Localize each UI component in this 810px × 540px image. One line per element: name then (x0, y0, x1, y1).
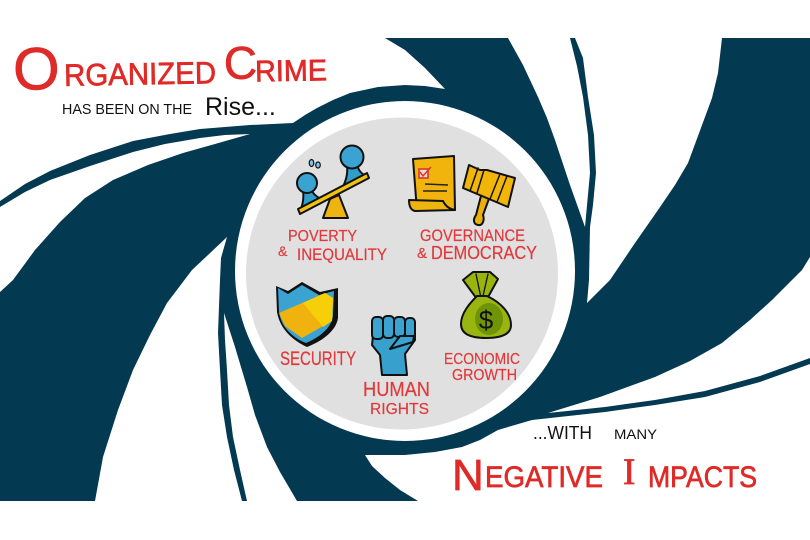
label: Poverty & Inequality: INEQUALITY (297, 245, 387, 264)
title: Organized Crime: C (223, 36, 258, 89)
icon: shield yellow band (279, 293, 333, 338)
icon: raised fist (372, 316, 415, 375)
icon: sweat drops (309, 160, 320, 168)
label: Poverty & Inequality: & (278, 243, 288, 259)
heading: Negative Impacts: N (452, 451, 484, 500)
icon: gavel (463, 165, 515, 225)
icon: money bag (461, 272, 511, 338)
title: Organized Crime: RGANIZED (64, 55, 216, 93)
title: Organized Crime: O (12, 35, 60, 103)
icon: plank (298, 173, 369, 214)
label: Security: SECURITY (280, 349, 356, 370)
label: Governance & Democracy: DEMOCRACY (431, 243, 537, 263)
label: Economic Growth: ECONOMIC (444, 351, 520, 368)
label: Human Rights: HUMAN (363, 379, 430, 401)
icon: dollar sign: $ (479, 305, 494, 335)
white ring (235, 101, 575, 441)
icon: ballot document (409, 156, 455, 211)
heading: Negative Impacts: MPACTS (648, 461, 757, 494)
heading: Negative Impacts: EGATIVE (485, 461, 603, 494)
label: Human Rights: RIGHTS (370, 401, 429, 418)
icon: figure right (343, 164, 366, 187)
subtitle: Has been on the rise: HAS BEEN ON THE (62, 101, 192, 118)
label: Governance & Democracy: GOVERNANCE (420, 226, 525, 245)
title: Organized Crime: RIME (255, 54, 327, 89)
grey center disc (246, 118, 558, 430)
icon: figure left (301, 190, 321, 209)
label: Governance & Democracy: & (417, 245, 427, 262)
icon: scroll foot (409, 200, 455, 211)
subtitle: Has been on the rise: Rise... (205, 93, 276, 121)
icon: seesaw with two figures (297, 146, 369, 218)
heading: Negative Impacts: I (623, 452, 635, 493)
icon: shield (276, 282, 338, 347)
label: Poverty & Inequality: POVERTY (288, 228, 357, 245)
icon: checkbox (419, 169, 428, 178)
label: Economic Growth: GROWTH (452, 367, 517, 384)
text: With many: MANY (614, 426, 658, 442)
icon: fulcrum (323, 195, 348, 218)
text: With many: ...WITH (533, 423, 592, 443)
